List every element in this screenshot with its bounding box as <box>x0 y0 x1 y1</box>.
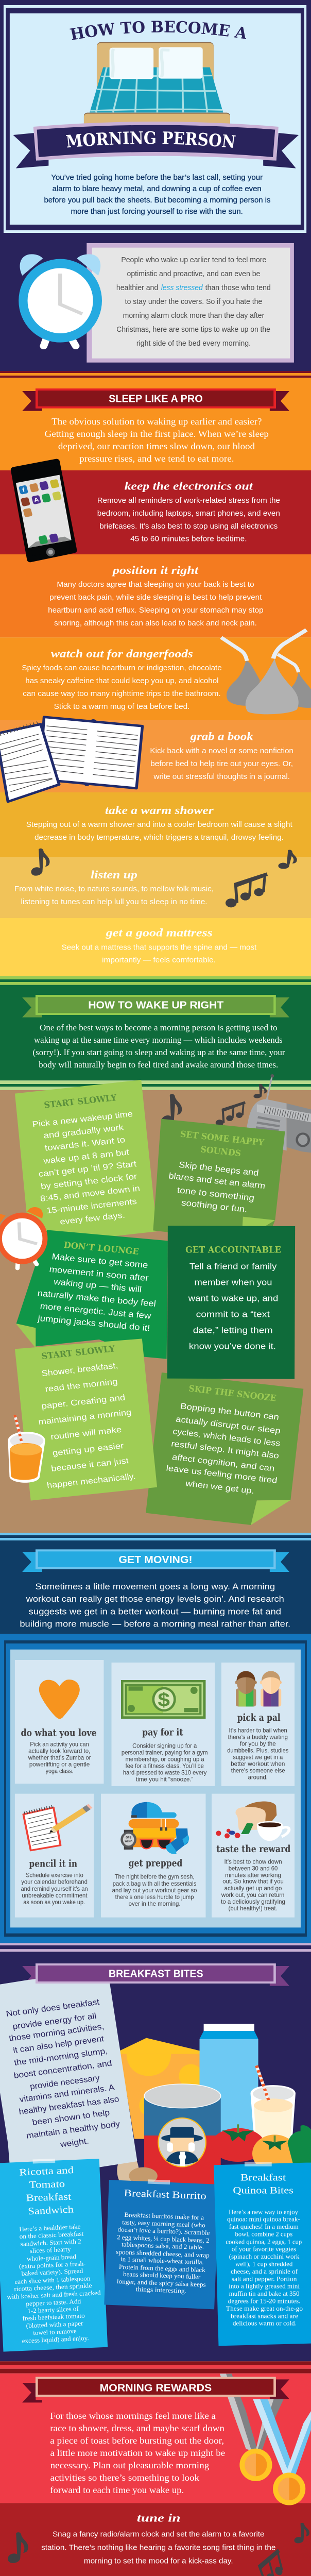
intro text: alarm to blare heavy metal, and downing a cup of coffee even <box>53 185 262 193</box>
note: set some happy sounds: SOUNDS <box>200 1144 241 1159</box>
recipe: breakfast burrito: spoons shredded cheese, and wrap <box>116 2248 210 2259</box>
section intro text: a little more motivation to wake up might be <box>50 2448 225 2459</box>
recipe: ricotta and tomato breakfast sandwich: Sandwich <box>28 2204 74 2217</box>
note: why breakfast matters: Not only does breakfast <box>5 1997 100 2019</box>
card: taste the reward: (but healthy!) treat. <box>229 1905 278 1912</box>
heading: breakfast bites: BREAKFAST BITES <box>109 1968 203 1979</box>
callout text: than those who tend <box>205 283 271 292</box>
card: pencil it in: Schedule exercise into <box>26 1872 83 1878</box>
note: start slowly routine: Shower, breakfast, <box>41 1361 118 1378</box>
recipe: breakfast quinoa bites: cooked quinoa, 2 eggs, 1 cup <box>226 2238 302 2245</box>
note: start slowly routine: because it can just <box>50 1455 129 1473</box>
note: why breakfast matters: provide necessary <box>29 2073 100 2091</box>
card: get prepped: and lay out your workout gear so <box>112 1887 197 1894</box>
callout text: optimistic and proactive, and can even be <box>127 269 260 278</box>
section intro text <box>50 2411 225 2496</box>
note: don't lounge: more energetic. Just a few <box>40 1301 152 1321</box>
tip: keep the electronics out: bedroom, including laptops, smart phones, and even <box>97 510 280 518</box>
icon: chocolate kisses <box>221 630 311 714</box>
card: get prepped: Watch <box>125 1840 132 1843</box>
recipe: ricotta and tomato breakfast sandwich: (extra points for a fresh- <box>19 2260 87 2270</box>
note: skip the snooze: SKIP THE SNOOZE <box>188 1384 277 1403</box>
ribbon heading <box>22 389 289 411</box>
note: don't lounge: Make sure to get some <box>51 1251 148 1270</box>
note: set some happy sounds: soothing or fun. <box>181 1198 248 1214</box>
card: get prepped: The night before the gym sesh, <box>115 1873 194 1880</box>
icon: bed <box>84 42 230 128</box>
section: how to wake up right intro <box>22 996 289 1070</box>
panel: get moving tips grid <box>4 1640 307 1937</box>
recipe: breakfast quinoa bites: Breakfast <box>240 2172 286 2183</box>
tip: grab a book: Kick back with a novel or some nonfiction <box>150 747 293 755</box>
recipe: ricotta and tomato breakfast sandwich: sandwich. Start with 2 <box>20 2238 81 2247</box>
card: taste the reward: to a deliciously gratifying <box>221 1899 285 1905</box>
note: start slowly: and gradually work <box>43 1122 124 1140</box>
tip: keep the electronics out: keep the electronics out <box>125 480 253 493</box>
tip: listen up <box>14 869 214 906</box>
card: get prepped: over in the morning. <box>129 1901 181 1907</box>
note: start slowly: START SLOWLY <box>43 1093 118 1110</box>
card: pay for it: hard-pressed to waste $10 every <box>123 1769 207 1776</box>
tip: watch out for dangerfoods: can cause way too many nighttime trips to the bathroom. <box>23 690 221 698</box>
card: pay for it <box>111 1663 215 1786</box>
tip: keep the electronics out: 45 to 60 minutes before bedtime. <box>130 535 247 543</box>
card: get prepped <box>101 1794 205 1918</box>
card: pick a pal: It’s harder to bail when <box>229 1727 287 1734</box>
tip: take a warm shower: take a warm shower <box>105 804 214 817</box>
card: pick a pal: suggest we get in a <box>233 1754 283 1760</box>
recipe: breakfast burrito: doesn’t love a burrito?). Scramble <box>117 2226 210 2237</box>
card: pick a pal: better workout when <box>231 1760 285 1767</box>
tip: grab a book: write out stressful thoughts in a journal. <box>153 773 290 781</box>
note: start slowly: 8:45, and move down in <box>40 1183 141 1204</box>
note: start slowly: every few days. <box>59 1210 126 1226</box>
recipe: breakfast burrito: Protein from the eggs and black <box>119 2263 205 2274</box>
note: start slowly: towards it. Want to <box>44 1134 126 1153</box>
note: set some happy sounds <box>153 1119 285 1243</box>
note: don't lounge: jumping jacks should do it! <box>37 1313 150 1333</box>
section intro text: workout can really get those energy levels goin’. And research <box>26 1594 284 1604</box>
recipe: breakfast quinoa bites: salt and pepper. Portion <box>232 2275 297 2282</box>
note: why breakfast matters: boost concentration, and <box>13 2058 113 2080</box>
recipe: ricotta and tomato breakfast sandwich: Here’s a healthier take <box>19 2223 81 2233</box>
tip: watch out for dangerfoods: Stick to a warm mug of tea before bed. <box>54 703 189 711</box>
icon: medals <box>220 2374 311 2505</box>
section: sleep like a pro intro <box>22 389 289 464</box>
note: start slowly routine: happen mechanically. <box>46 1471 136 1490</box>
card: do what you love: yoga class. <box>46 1768 74 1774</box>
tip: grab a book: before bed to help tire out your eyes. Or, <box>150 760 293 768</box>
tip: watch out for dangerfoods: has sneaky caffeine that could keep you up, and alcohol <box>25 677 218 685</box>
recipe: ricotta and tomato breakfast sandwich <box>0 2159 108 2352</box>
tip: keep the electronics out: briefcases. It’s also best to stop using all electronics <box>99 522 278 531</box>
note: why breakfast matters: healthy breakfast has also <box>18 2094 120 2116</box>
intro text: before you pull back the sheets. But becoming a morning person is <box>44 196 270 205</box>
note: get accountable: commit to a “text <box>196 1310 270 1319</box>
note: get accountable: Tell a friend or family <box>189 1262 277 1271</box>
tip: position it right: Many doctors agree that sleeping on your back is best to <box>57 581 254 589</box>
note: set some happy sounds: tone to something <box>177 1185 255 1203</box>
tip: take a warm shower <box>26 804 292 842</box>
card: taste the reward: actually get up and go <box>224 1885 282 1892</box>
note: get accountable: member when you <box>194 1278 272 1287</box>
section intro text: building more muscle — before a morning meal rather than after. <box>20 1619 290 1629</box>
section intro text: The obvious solution to waking up earlier and easier? <box>51 417 262 427</box>
card: do what you love: Pick an activity you can <box>30 1741 89 1748</box>
callout text: right side of the bed every morning. <box>136 339 251 348</box>
tip: get a good mattress: importantly — feels comfortable. <box>102 956 216 964</box>
note: get accountable: know you’ve done it. <box>189 1342 276 1351</box>
tip: watch out for dangerfoods <box>22 648 222 711</box>
recipe: breakfast quinoa bites: muffin tin and bake at 350 <box>229 2290 300 2297</box>
note: start slowly: wake up at 8 am but <box>42 1147 130 1166</box>
card: pencil it in: unbreakable commitment <box>22 1892 88 1899</box>
icon: music notes on the board <box>162 1084 267 1126</box>
ribbon heading: HOW TO WAKE UP RIGHT <box>88 999 224 1011</box>
card: pay for it: Consider signing up for a <box>132 1742 197 1749</box>
section intro text: race to shower, dress, and maybe scarf down <box>50 2424 224 2434</box>
note: skip the snooze: leave us feeling more tired <box>166 1463 278 1485</box>
card: pencil it in: your calendar beforehand <box>21 1878 88 1885</box>
recipe: breakfast burrito <box>104 2179 219 2309</box>
card: pencil it in: pencil it in <box>29 1858 77 1869</box>
note: set some happy sounds: SET SOME HAPPY <box>180 1129 265 1148</box>
recipe: breakfast quinoa bites: Here’s a new way to enjoy <box>229 2208 298 2215</box>
card: taste the reward: It’s best to chow down <box>224 1858 282 1865</box>
section intro text <box>33 1023 285 1070</box>
tip: listen up: listen up <box>91 869 137 882</box>
intro text: more than just forcing yourself to rise with the sun. <box>71 208 243 216</box>
card: pencil it in <box>15 1794 94 1918</box>
note: start slowly: by setting the clock for <box>40 1172 138 1191</box>
tip: keep the electronics out <box>97 480 280 543</box>
section intro text: One of the best ways to become a morning person is getting used to <box>40 1023 278 1033</box>
card: pick a pal <box>221 1663 295 1786</box>
card: pay for it: time you hit “snooze.” <box>136 1776 194 1783</box>
ribbon heading <box>22 2378 289 2402</box>
card: get prepped: pack a bag with all the essentials <box>113 1880 196 1887</box>
banner: morning person: MORNING PERSON <box>66 131 236 148</box>
note: set some happy sounds: Skip the beeps and <box>178 1160 260 1178</box>
ribbon heading: MORNING REWARDS <box>100 2382 212 2394</box>
recipe: ricotta and tomato breakfast sandwich: whole-grain bread <box>26 2253 77 2262</box>
section: morning rewards intro <box>22 2378 289 2496</box>
note: don't lounge: DON’T LOUNGE <box>63 1240 140 1257</box>
recipe: ricotta and tomato breakfast sandwich: Ricotta and <box>19 2164 74 2178</box>
card: do what you love: powerlifting or a gentle <box>29 1761 90 1768</box>
recipe: breakfast quinoa bites <box>214 2162 311 2346</box>
section intro text: For those whose mornings feel more like a <box>50 2411 216 2421</box>
recipe: ricotta and tomato breakfast sandwich: (blotted with a paper <box>26 2319 83 2330</box>
recipe: breakfast quinoa bites: cheese, and a sprinkle of <box>231 2268 298 2275</box>
tip: position it right: prevent back pain, while side sleeping is best to help prevent <box>49 594 262 602</box>
section intro text: Sometimes a little movement goes a long way. A morning <box>35 1582 275 1591</box>
note: get accountable: want to wake up, and <box>188 1294 278 1303</box>
tip: position it right: snoring, although this can also lead to back and neck pain. <box>54 619 257 628</box>
note: start slowly routine: getting up easier <box>52 1440 125 1458</box>
recipe: ricotta and tomato breakfast sandwich: excess liquid) and enjoy. <box>22 2334 89 2345</box>
note: skip the snooze <box>146 1372 303 1525</box>
tip: get a good mattress: get a good mattress <box>106 926 213 939</box>
card: pick a pal: there’s a buddy waiting <box>228 1734 288 1740</box>
card: pick a pal: for you by the <box>240 1740 276 1747</box>
tip: take a warm shower: decrease in body temperature, which triggers a tranquil, drowsy feeling. <box>34 834 284 842</box>
tip: position it right: heartburn and acid reflux. Sleeping on your stomach may stop <box>48 606 264 615</box>
tip: listen up: From white noise, to nature sounds, to mellow folk music, <box>14 885 214 893</box>
recipe: breakfast burrito: in 1 small whole-wheat tortilla. <box>120 2256 204 2266</box>
recipe: ricotta and tomato breakfast sandwich: 1-2 hearty slices of <box>27 2305 79 2314</box>
card: do what you love: whether that’s Zumba or <box>28 1754 91 1761</box>
recipe: breakfast burrito: things interesting. <box>135 2285 187 2295</box>
note: why breakfast matters: been shown to help <box>31 2108 110 2127</box>
tip: position it right <box>48 564 264 628</box>
recipe: breakfast burrito: tablespoons salsa, and 2 table- <box>122 2241 205 2251</box>
card: pencil it in: as soon as you wake up. <box>23 1899 85 1906</box>
section: get moving intro <box>20 1550 290 1629</box>
callout text <box>116 256 271 348</box>
recipe: ricotta and tomato breakfast sandwich: each slice with 1 tablespoon <box>14 2275 91 2285</box>
tip: grab a book: grab a book <box>190 730 253 743</box>
section intro text <box>45 417 269 464</box>
panel: why wake early callout <box>87 243 294 363</box>
note: why breakfast matters: it can also help prevent <box>12 2033 105 2055</box>
icon: smartphone <box>14 462 74 560</box>
note: don't lounge: waking up — this will <box>53 1277 142 1294</box>
section intro text <box>20 1582 290 1629</box>
illustration: breakfast foods <box>117 2024 311 2187</box>
section intro text: a piece of toast before bursting out the door, <box>50 2436 224 2446</box>
recipe: breakfast quinoa bites: (spinach or zucchini work <box>229 2253 300 2261</box>
recipe: breakfast burrito: 2 egg whites, ¼ cup black beans, 2 <box>117 2233 210 2244</box>
tip: grab a book <box>150 730 293 781</box>
card: do what you love <box>15 1660 103 1784</box>
recipe: ricotta and tomato breakfast sandwich: on the classic breakfast <box>19 2230 84 2240</box>
icon: music notes <box>31 849 299 907</box>
note: start slowly <box>15 1080 157 1245</box>
tip: tune in: tune in <box>137 2512 181 2524</box>
callout text: less stressed <box>161 283 203 292</box>
tip: watch out for dangerfoods: Spicy foods can cause heartburn or indigestion, chocolate <box>22 664 222 672</box>
recipe: breakfast quinoa bites: quinoa: mini quinoa break- <box>227 2216 300 2223</box>
ribbon heading <box>22 1550 289 1572</box>
note: don't lounge <box>16 1230 168 1359</box>
section intro text: pressure rises, and we tend to eat more. <box>79 454 234 464</box>
card: get prepped: GPS <box>126 1836 132 1839</box>
recipe: ricotta and tomato breakfast sandwich: baked variety). Spread <box>21 2267 83 2278</box>
card: do what you love: actually look forward to, <box>28 1748 90 1754</box>
heading: how to become a: HOW TO BECOME A <box>70 21 246 40</box>
card: pay for it: personal trainer, paying for a gym <box>122 1749 208 1756</box>
ribbon heading: GET MOVING! <box>118 1553 193 1566</box>
icon: spiral notepad <box>0 723 59 802</box>
callout text: to stay under the covers. So if you hate the <box>125 297 262 306</box>
card: taste the reward: minutes after working <box>225 1872 281 1878</box>
recipe: breakfast quinoa bites: degrees for 15-20 minutes. <box>228 2298 300 2304</box>
note: start slowly routine: routine will make <box>50 1425 122 1442</box>
note: start slowly routine: maintaining a morning <box>38 1407 132 1427</box>
recipe: breakfast burrito: Breakfast Burrito <box>124 2187 206 2201</box>
section intro text: necessary. Plan out pleasurable morning <box>50 2461 210 2471</box>
tip: tune in: station. There’s nothing like hearing a favorite song first thing in the <box>41 2544 276 2552</box>
recipe: breakfast quinoa bites: fast quiches! In a medium <box>229 2223 299 2230</box>
heading: breakfast bites <box>37 1964 275 1982</box>
card: taste the reward: between 30 and 60 <box>229 1865 278 1872</box>
recipe: breakfast quinoa bites: bowl, combine 2 cups <box>235 2231 292 2238</box>
card: taste the reward: out. So know that if you <box>222 1878 284 1885</box>
tip: tune in: morning to set the mood for a kick-ass day. <box>84 2557 233 2565</box>
note: why breakfast matters: weight. <box>59 2136 90 2149</box>
card: pencil it in: and remind yourself it’s an <box>21 1886 88 1892</box>
note: don't lounge: movement in soon after <box>49 1264 149 1283</box>
recipe: ricotta and tomato breakfast sandwich: slices of hearty <box>29 2245 71 2255</box>
icon: smartphone: A <box>33 496 40 504</box>
card: pick a pal: there’s someone else <box>231 1767 285 1774</box>
note: skip the snooze: affect cognition, and can <box>171 1452 275 1473</box>
icon: music notes in rewards <box>8 2523 309 2576</box>
callout text: morning alarm clock more than the day after <box>123 311 265 320</box>
callout text: People who wake up earlier tend to feel more <box>121 256 266 264</box>
panel: hero title frame <box>3 5 307 233</box>
note: start slowly: can’t get up ’til 9? Start <box>38 1159 137 1179</box>
note: set some happy sounds: blares and set an alarm <box>168 1171 266 1191</box>
recipe: ricotta and tomato breakfast sandwich: Breakfast <box>26 2191 72 2204</box>
card: taste the reward <box>212 1794 295 1918</box>
card: pick a pal: around. <box>248 1774 268 1781</box>
note: get accountable <box>167 1226 295 1379</box>
note: start slowly routine: START SLOWLY <box>41 1344 116 1362</box>
intro text <box>44 174 270 216</box>
section intro text: Getting enough sleep in the first place. When we’re sleep <box>45 429 269 439</box>
note: get accountable: date,” letting them <box>193 1326 273 1335</box>
section intro text: suggests we get in a better workout — burning more fat and <box>29 1607 281 1616</box>
recipe: ricotta and tomato breakfast sandwich: ricotta cheese, then sprinkle <box>14 2282 92 2293</box>
recipe: ricotta and tomato breakfast sandwich: with kosher salt and fresh cracked <box>7 2289 101 2300</box>
recipe: breakfast burrito: beans should keep you fuller <box>123 2270 201 2280</box>
tip: keep the electronics out: Remove all reminders of work-related stress from the <box>97 497 280 505</box>
recipe: ricotta and tomato breakfast sandwich: towel to remove <box>33 2327 77 2336</box>
tip: watch out for dangerfoods: watch out for dangerfoods <box>51 648 193 660</box>
recipe: breakfast quinoa bites: well), 1 cup shredded <box>235 2261 293 2268</box>
card: pay for it: $ <box>158 1689 170 1710</box>
note: skip the snooze: when we get up. <box>184 1478 255 1496</box>
section intro text: activities so there’s something to look <box>50 2473 199 2483</box>
recipe: breakfast quinoa bites: delicious warm or cold. <box>233 2320 297 2327</box>
ribbon heading <box>22 996 289 1018</box>
card: taste the reward: work out, you can return <box>221 1892 284 1899</box>
callout text: healthier and <box>116 283 158 292</box>
card: pay for it: membership, or coughing up a <box>125 1756 204 1762</box>
tip: tune in: Snag a fancy radio/alarm clock and set the alarm to a favorite <box>53 2530 265 2538</box>
card: pay for it: fee for a fitness class. You’ll be <box>126 1762 204 1769</box>
card: pay for it: pay for it <box>142 1726 183 1738</box>
card: get prepped: get prepped <box>129 1857 182 1869</box>
intro text: You’ve tried going home before the bar’s last call, setting your <box>51 174 263 182</box>
tip: get a good mattress: Seek out a mattress that supports the spine and — most <box>62 943 257 952</box>
note: start slowly routine: read the morning <box>44 1377 118 1394</box>
banner: morning person <box>13 122 299 168</box>
recipe: ricotta and tomato breakfast sandwich: Tomato <box>29 2178 65 2191</box>
recipe: breakfast quinoa bites: Quinoa Bites <box>233 2184 293 2196</box>
card: pick a pal: pick a pal <box>237 1711 281 1723</box>
section intro text: deprived, our reaction times slow down, our blood <box>58 442 255 452</box>
recipe: ricotta and tomato breakfast sandwich: fresh beefsteak tomato <box>22 2312 85 2322</box>
tip: get a good mattress <box>62 926 257 964</box>
icon: radio <box>247 1074 311 1153</box>
tip: position it right: position it right <box>112 564 199 577</box>
recipe: breakfast quinoa bites: breakfast snacks and are <box>231 2312 298 2319</box>
icon: blue alarm clock <box>19 254 102 346</box>
recipe: breakfast burrito: tasty, easy morning meal (who <box>122 2218 205 2229</box>
section: breakfast bites ribbon <box>22 1966 289 1986</box>
ribbon heading: SLEEP LIKE A PRO <box>109 393 203 404</box>
icon: glass of juice <box>8 1415 45 1483</box>
section intro text: forward to each time you wake up. <box>50 2485 184 2496</box>
note: skip the snooze: restful sleep. It might also <box>170 1438 280 1461</box>
card: pick a pal: dumbbells. Plus, studies <box>227 1747 288 1754</box>
card: get prepped: there’s one less hurdle to jump <box>115 1894 194 1901</box>
note: why breakfast matters: provide energy for all <box>12 2011 97 2031</box>
note: why breakfast matters <box>0 1970 137 2180</box>
note: why breakfast matters: vitamins and minerals. A <box>19 2082 115 2104</box>
tip: tune in <box>41 2512 276 2565</box>
note: why breakfast matters: those morning activities, <box>8 2021 105 2043</box>
icon: smartphone: f <box>22 486 26 494</box>
recipe: breakfast quinoa bites: of your favorite veggies <box>232 2246 296 2252</box>
recipe: breakfast quinoa bites: These make great on-the-go <box>226 2305 303 2312</box>
note: skip the snooze: cycles, which leads to less <box>172 1426 281 1448</box>
recipe: breakfast quinoa bites: into a lightly greased mini <box>229 2283 300 2290</box>
recipe: breakfast burrito: Breakfast burritos make for a <box>124 2211 204 2221</box>
card: do what you love: do what you love <box>21 1727 97 1738</box>
note: skip the snooze: actually disrupt our sleep <box>175 1414 281 1435</box>
note: skip the snooze: Bopping the button can <box>180 1401 280 1422</box>
icon: open book <box>40 717 143 788</box>
note: why breakfast matters: maintain a healthy body <box>26 2119 121 2140</box>
note: start slowly routine: paper. Creating and <box>41 1393 126 1411</box>
note: get accountable: GET ACCOUNTABLE <box>185 1245 281 1255</box>
callout text: Christmas, here are some tips to wake up on the <box>116 325 270 334</box>
note: don't lounge: naturally make the body feel <box>37 1288 157 1309</box>
note: start slowly: 15-minute increments <box>46 1196 137 1215</box>
recipe: ricotta and tomato breakfast sandwich: pepper to taste. Add <box>26 2298 81 2308</box>
tip: listen up: listening to tunes can help lull you to sleep in no time. <box>21 898 208 906</box>
note: start slowly routine <box>15 1338 157 1501</box>
note: start slowly: Pick a new wakeup time <box>31 1109 133 1129</box>
recipe: breakfast burrito: longer, and the spicy salsa keeps <box>117 2278 206 2288</box>
icon: orange alarm clock <box>0 1207 47 1268</box>
note: why breakfast matters: the mid-morning slump, <box>13 2046 108 2067</box>
